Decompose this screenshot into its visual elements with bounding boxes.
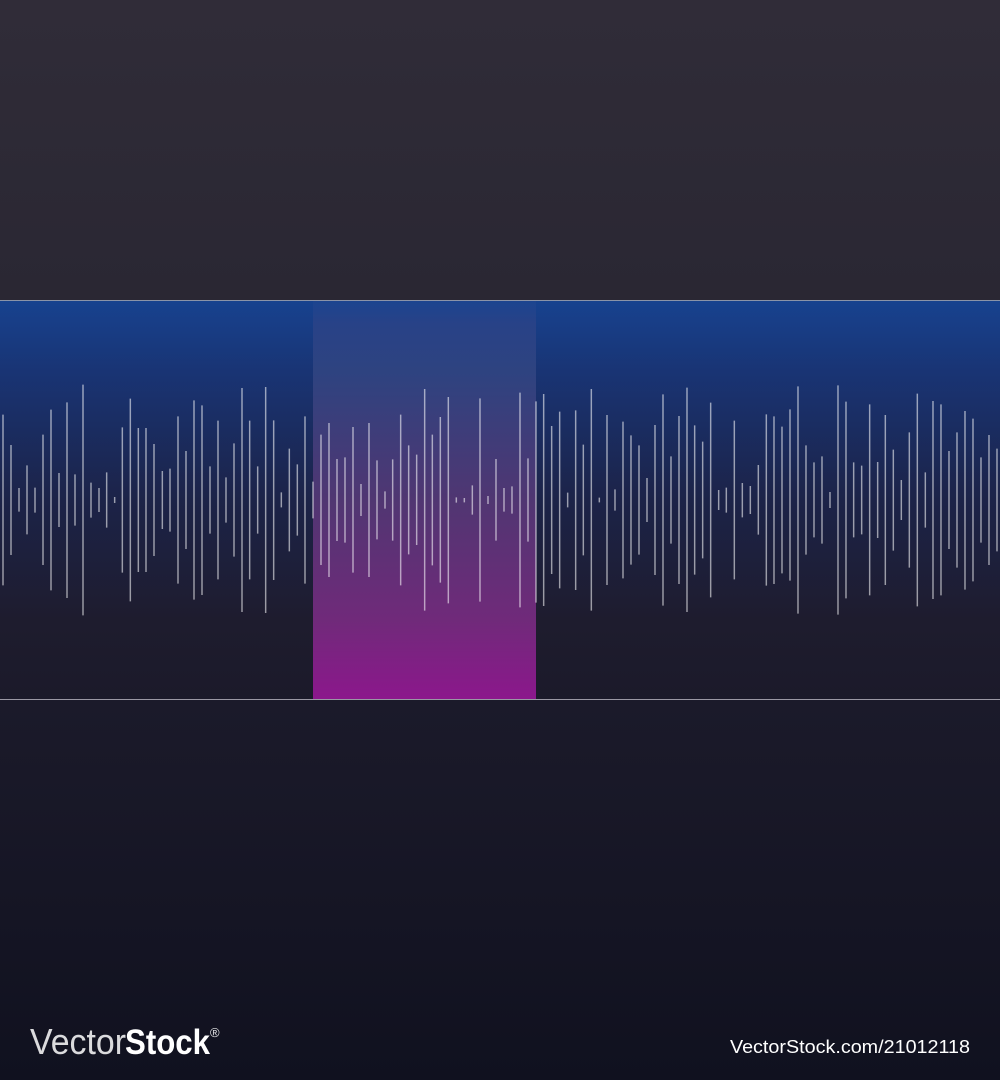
logo registered mark: ® <box>210 1025 220 1040</box>
logo word: Vector: Vector <box>30 1021 126 1062</box>
waveform <box>3 385 997 615</box>
central band <box>0 300 1000 700</box>
waveform right section <box>663 385 997 615</box>
image id caption: VectorStock.com/21012118 <box>730 1036 970 1057</box>
band top border <box>0 300 1000 301</box>
waveform middle section <box>321 389 655 611</box>
highlighted column <box>313 300 536 700</box>
logo word: Stock: Stock <box>125 1023 210 1062</box>
band bottom border <box>0 699 1000 700</box>
logo: VectorStock <box>30 1021 220 1062</box>
waveform left section <box>3 385 313 615</box>
